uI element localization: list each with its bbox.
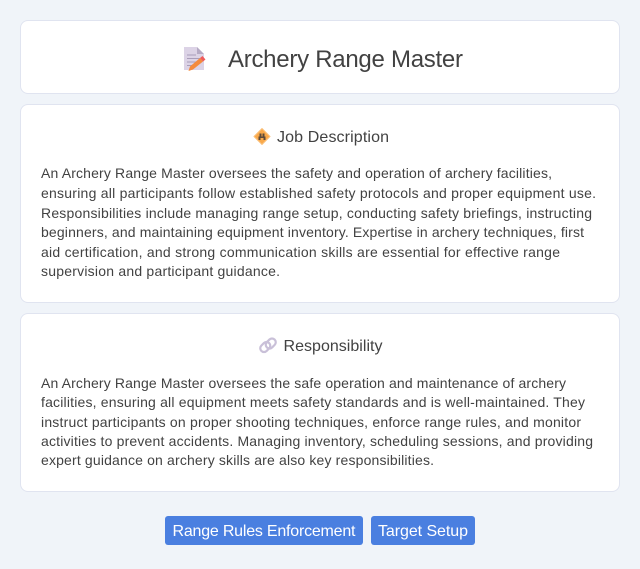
text block: responsibility: expert guidance on archery skills are also key responsibilities.: [41, 452, 434, 468]
text block: job description: An Archery Range Master oversees the safety and operation of archery facilities,: [41, 165, 552, 181]
tag background: range rules enforcement: [165, 516, 363, 545]
tag label: range rules enforcement: Range Rules Enforcement: [172, 523, 356, 540]
panel: title card: [20, 20, 620, 94]
text block: job description: ensuring all participants follow established safety protocols and proper equipment use.: [41, 185, 596, 201]
text block: responsibility: An Archery Range Master oversees the safe operation and maintenance of archery: [41, 375, 566, 391]
title: Archery Range Master: [228, 46, 463, 73]
text block: responsibility: facilities, ensuring all equipment meets safety standards and is well-maintained. They: [41, 394, 585, 410]
tag label: target setup: Target Setup: [378, 523, 468, 540]
text block: job description: beginners, and maintaining equipment inventory. Expertise in archery techniques, first: [41, 224, 584, 240]
icon: chain link: [259, 337, 277, 354]
panel: responsibility card: [20, 313, 620, 492]
text block: job description: supervision and participant guidance.: [41, 263, 280, 279]
text block: job description: [41, 165, 596, 279]
text block: responsibility: instruct participants on proper shooting techniques, enforce range rules, and monitor: [41, 414, 581, 430]
icon: diamond warning sign: [254, 128, 270, 144]
text block: responsibility: [41, 375, 593, 468]
tag background: target setup: [371, 516, 475, 545]
panel: job description card: [20, 104, 620, 303]
text block: responsibility: activities to prevent accidents. Managing inventory, scheduling sessions, and providing: [41, 433, 593, 449]
heading: job description: Job Description: [277, 129, 389, 146]
icon: document with pencil: [184, 47, 206, 71]
text block: job description: Responsibilities include managing range setup, conducting safety briefings, instructing: [41, 205, 592, 221]
heading: responsibility: Responsibility: [284, 338, 382, 355]
text block: job description: aid certification, and strong communication skills are essential for effective range: [41, 244, 560, 260]
